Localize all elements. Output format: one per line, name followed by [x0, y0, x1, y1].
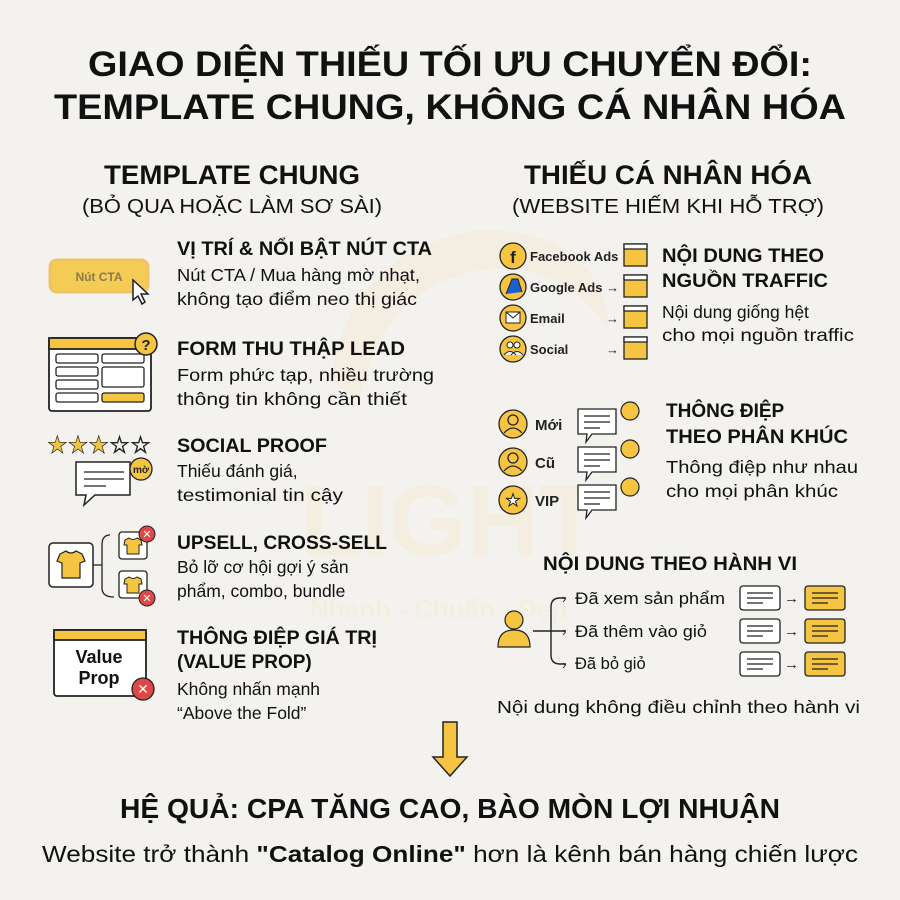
- watermark logo: Nhanh - Chuẩn - Đẹp: [310, 594, 567, 624]
- title: GIAO DIỆN THIẾU TỐI ƯU CHUYỂN ĐỔI:: [88, 44, 812, 84]
- item: social proof: ★★★: [47, 432, 109, 459]
- behavior: Đã bỏ giỏ: [575, 655, 646, 673]
- item: form: FORM THU THẬP LEAD: [177, 338, 405, 360]
- item: value prop: “Above the Fold”: [177, 703, 307, 723]
- traffic sources: NỘI DUNG THEO: [662, 245, 824, 267]
- watermark logo: [300, 230, 610, 624]
- title: [54, 44, 846, 127]
- item: value prop: Value: [75, 647, 123, 667]
- item: form: Form phức tạp, nhiều trường: [177, 365, 434, 385]
- segments: Mới: [535, 417, 562, 434]
- item: CTA: không tạo điểm neo thị giác: [177, 289, 417, 309]
- item: upsell: [49, 526, 387, 606]
- item: social proof: Thiếu đánh giá,: [177, 461, 298, 481]
- item: form: [49, 333, 434, 411]
- title: TEMPLATE CHUNG, KHÔNG CÁ NHÂN HÓA: [54, 87, 846, 127]
- behavior: →: [784, 656, 799, 673]
- item: social proof: [47, 432, 343, 505]
- item: value prop: Prop: [78, 668, 120, 688]
- conclusion: HỆ QUẢ: CPA TĂNG CAO, BÀO MÒN LỢI NHUẬN: [120, 792, 780, 824]
- traffic sources: Google Ads →: [530, 280, 619, 295]
- item: value prop: [54, 627, 377, 723]
- conclusion: [42, 792, 858, 867]
- item: CTA: VỊ TRÍ & NỔI BẬT NÚT CTA: [177, 238, 432, 260]
- behavior: ›: [562, 591, 566, 606]
- right heading: THIẾU CÁ NHÂN HÓA: [524, 159, 812, 190]
- item: value prop: (VALUE PROP): [177, 652, 312, 673]
- segments: THÔNG ĐIỆP: [666, 400, 785, 422]
- traffic sources: →: [606, 342, 619, 357]
- traffic sources: f: [510, 248, 516, 267]
- behavior: ›: [562, 624, 566, 639]
- watermark logo: LIGHT: [300, 465, 600, 577]
- behavior: [497, 553, 860, 717]
- traffic sources: [500, 243, 854, 362]
- segments: Thông điệp như nhau: [666, 457, 858, 477]
- right heading: (WEBSITE HIẾM KHI HỖ TRỢ): [512, 194, 824, 218]
- segments: Cũ: [535, 455, 555, 472]
- item: value prop: ✕: [137, 681, 149, 697]
- behavior: →: [784, 623, 799, 640]
- left heading: (BỎ QUA HOẶC LÀM SƠ SÀI): [82, 194, 382, 218]
- item: value prop: Không nhấn mạnh: [177, 679, 320, 699]
- behavior: Đã xem sản phẩm: [575, 590, 725, 608]
- item: social proof: testimonial tin cậy: [177, 485, 343, 505]
- segments: VIP: [535, 493, 559, 510]
- right heading: [512, 159, 824, 218]
- item: upsell: ✕: [142, 529, 152, 541]
- item: social proof: mờ: [133, 465, 150, 476]
- traffic sources: cho mọi nguồn traffic: [662, 325, 854, 345]
- conclusion: Website trở thành "Catalog Online" hơn là kênh bán hàng chiến lược: [42, 841, 858, 867]
- behavior: Đã thêm vào giỏ: [575, 623, 707, 641]
- segments: ★: [505, 491, 521, 510]
- behavior: Nội dung không điều chỉnh theo hành vi: [497, 697, 860, 717]
- item: upsell: ✕: [142, 593, 152, 605]
- segments: cho mọi phân khúc: [666, 481, 838, 501]
- item: CTA: Nút CTA: [75, 270, 123, 284]
- item: value prop: THÔNG ĐIỆP GIÁ TRỊ: [177, 627, 377, 649]
- left heading: [82, 160, 382, 218]
- traffic sources: Nội dung giống hệt: [662, 302, 809, 322]
- arrow down: [433, 722, 467, 776]
- segments: THEO PHÂN KHÚC: [666, 426, 848, 448]
- item: social proof: ☆☆: [109, 432, 151, 459]
- left heading: TEMPLATE CHUNG: [104, 160, 360, 190]
- behavior: NỘI DUNG THEO HÀNH VI: [543, 553, 797, 575]
- traffic sources: →: [606, 311, 619, 326]
- item: form: thông tin không cần thiết: [177, 389, 407, 409]
- traffic sources: Email: [530, 311, 565, 326]
- behavior: ›: [562, 657, 566, 672]
- traffic sources: NGUỒN TRAFFIC: [662, 270, 828, 292]
- item: CTA: Nút CTA / Mua hàng mờ nhạt,: [177, 265, 420, 285]
- item: social proof: SOCIAL PROOF: [177, 436, 327, 457]
- behavior: →: [784, 590, 799, 607]
- item: upsell: UPSELL, CROSS-SELL: [177, 533, 387, 554]
- item: upsell: Bỏ lỡ cơ hội gợi ý sản: [177, 557, 349, 577]
- item: upsell: phẩm, combo, bundle: [177, 581, 345, 601]
- segments: [499, 400, 858, 518]
- traffic sources: Facebook Ads: [530, 249, 618, 264]
- traffic sources: Social: [530, 342, 568, 357]
- item: form: ?: [141, 337, 151, 354]
- item: CTA: [50, 238, 432, 309]
